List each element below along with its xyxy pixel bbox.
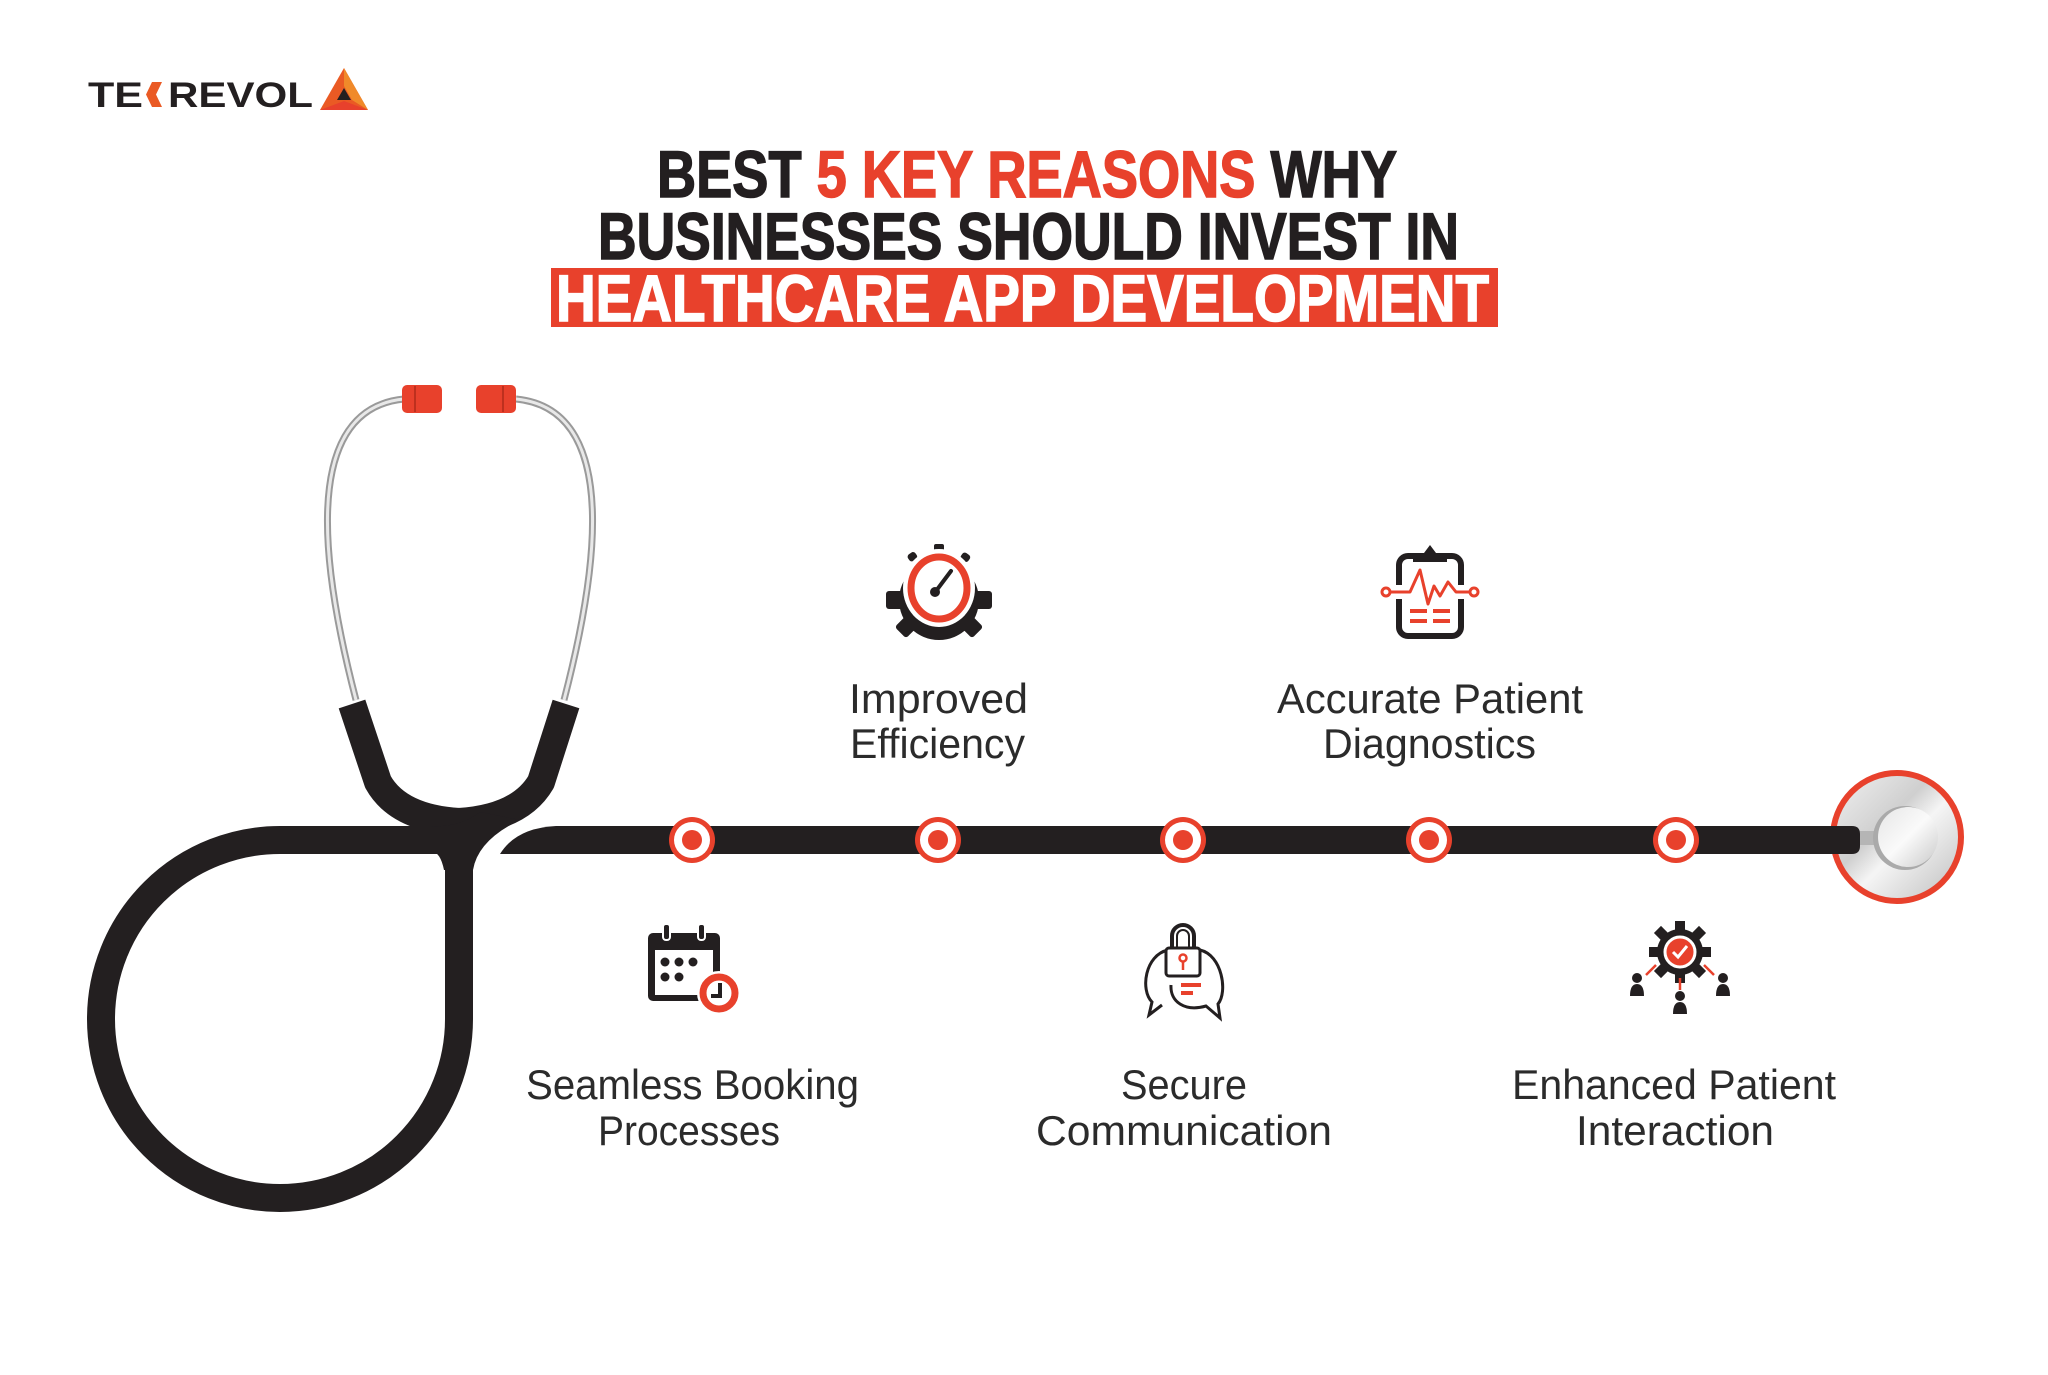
icon: calendar clock bbox=[648, 924, 741, 1015]
title: BEST 5 KEY REASONS WHY bbox=[657, 137, 1397, 211]
label: Accurate Patient Diagnostics: Accurate Patient bbox=[1277, 675, 1583, 722]
icon: gear stopwatch bbox=[886, 544, 992, 640]
label: Improved Efficiency bbox=[849, 675, 1028, 767]
icon: secure chat lock bbox=[1146, 925, 1223, 1018]
label: Seamless Booking Processes bbox=[526, 1061, 859, 1154]
title: BUSINESSES SHOULD INVEST IN bbox=[598, 199, 1459, 273]
stethoscope bbox=[101, 385, 1860, 1198]
logo: Tekrevol: TE bbox=[88, 76, 143, 115]
icon: patient network gear bbox=[1630, 921, 1730, 1014]
timeline dots bbox=[669, 817, 1699, 863]
binaural black bbox=[352, 704, 566, 822]
label: Seamless Booking Processes: Seamless Booking bbox=[526, 1061, 859, 1108]
label: Secure Communication: Secure bbox=[1121, 1061, 1247, 1108]
label: Improved Efficiency: Improved bbox=[849, 675, 1028, 722]
logo: Tekrevol bbox=[88, 68, 368, 115]
chest piece bbox=[1833, 773, 1961, 901]
thin metal tubes bbox=[327, 399, 404, 700]
loop tubing bbox=[101, 836, 459, 1198]
icon: clipboard diagnostics bbox=[1382, 545, 1478, 636]
label: Enhanced Patient Interaction: Interaction bbox=[1576, 1107, 1774, 1154]
label: Enhanced Patient Interaction: Enhanced Patient bbox=[1512, 1061, 1836, 1108]
title bbox=[551, 137, 1498, 335]
label: Improved Efficiency: Efficiency bbox=[850, 720, 1025, 767]
ear tips bbox=[402, 385, 442, 413]
label: Seamless Booking Processes: Processes bbox=[598, 1107, 780, 1154]
label: Enhanced Patient Interaction bbox=[1512, 1061, 1836, 1154]
logo: Tekrevol: REVOL bbox=[168, 76, 313, 115]
label: Secure Communication bbox=[1036, 1061, 1332, 1154]
label: Secure Communication: Communication bbox=[1036, 1107, 1332, 1154]
label: Accurate Patient Diagnostics: Diagnostics bbox=[1323, 720, 1536, 767]
label: Accurate Patient Diagnostics bbox=[1277, 675, 1583, 767]
bar to chest piece bbox=[500, 826, 1860, 854]
title: HEALTHCARE APP DEVELOPMENT bbox=[556, 261, 1489, 335]
